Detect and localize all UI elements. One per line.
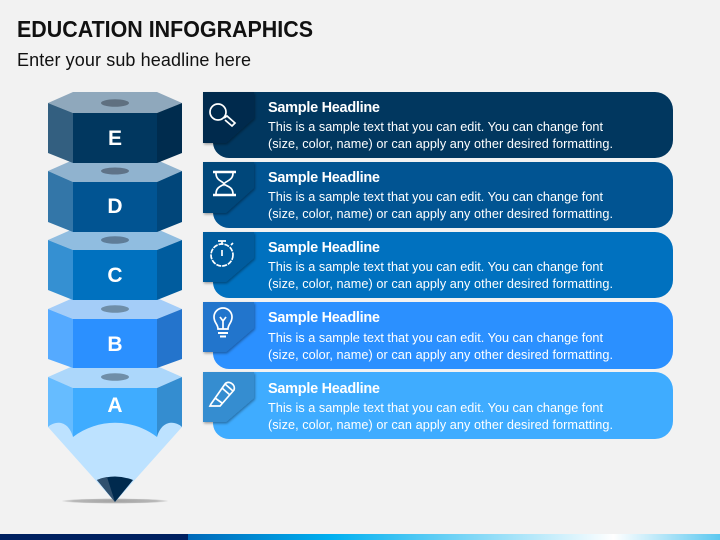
body text	[268, 331, 613, 362]
pencil wood cone	[48, 423, 182, 502]
icon: pencil	[210, 382, 234, 406]
segment E	[48, 92, 182, 163]
card D	[203, 162, 673, 228]
segment D	[48, 160, 182, 232]
card body	[213, 232, 673, 298]
body text: (size, color, name) or can apply any other desired formatting.	[268, 348, 613, 362]
subtitle: Enter your sub headline here	[17, 50, 251, 70]
body text: (size, color, name) or can apply any other desired formatting.	[268, 137, 613, 151]
body text: This is a sample text that you can edit. You can change font	[268, 401, 603, 415]
title: EDUCATION INFOGRAPHICS	[17, 16, 313, 42]
body text	[268, 260, 613, 291]
segment C	[48, 229, 182, 300]
icon tag	[203, 232, 254, 282]
headline: Sample Headline	[268, 310, 380, 326]
pencil graphite tip	[97, 476, 133, 502]
icon tag	[203, 92, 254, 143]
icon: hourglass	[213, 172, 236, 195]
body text	[268, 190, 613, 221]
card B	[203, 302, 673, 369]
card E	[203, 92, 673, 158]
body text: This is a sample text that you can edit. You can change font	[268, 331, 603, 345]
headline: Sample Headline	[268, 381, 380, 397]
footer bar	[0, 534, 720, 540]
icon tag	[203, 302, 254, 352]
body text: This is a sample text that you can edit. You can change font	[268, 120, 603, 134]
card body	[213, 372, 673, 439]
pencil tip shadow	[62, 498, 168, 504]
segment D: D	[107, 195, 123, 218]
card A	[203, 372, 673, 439]
icon tag	[203, 162, 254, 213]
body text: (size, color, name) or can apply any other desired formatting.	[268, 418, 613, 432]
segment B	[48, 298, 182, 368]
segment C: C	[107, 264, 123, 287]
headline: Sample Headline	[268, 170, 380, 186]
body text: (size, color, name) or can apply any other desired formatting.	[268, 277, 613, 291]
icon tag	[203, 372, 254, 422]
headline: Sample Headline	[268, 240, 380, 256]
card body	[213, 302, 673, 369]
body text: This is a sample text that you can edit. You can change font	[268, 260, 603, 274]
headline: Sample Headline	[268, 100, 380, 116]
segment A: A	[107, 394, 123, 417]
segment E: E	[108, 127, 122, 150]
icon: stopwatch	[211, 241, 233, 266]
card C	[203, 232, 673, 298]
body text	[268, 401, 613, 432]
body text	[268, 120, 613, 151]
body text: (size, color, name) or can apply any other desired formatting.	[268, 207, 613, 221]
segment B: B	[107, 333, 123, 356]
icon: magnifier	[210, 104, 235, 126]
icon: light bulb	[214, 308, 232, 336]
card body	[213, 162, 673, 228]
card body	[213, 92, 673, 158]
pencil illustration	[48, 92, 182, 504]
body text: This is a sample text that you can edit. You can change font	[268, 190, 603, 204]
segment A	[48, 366, 182, 502]
